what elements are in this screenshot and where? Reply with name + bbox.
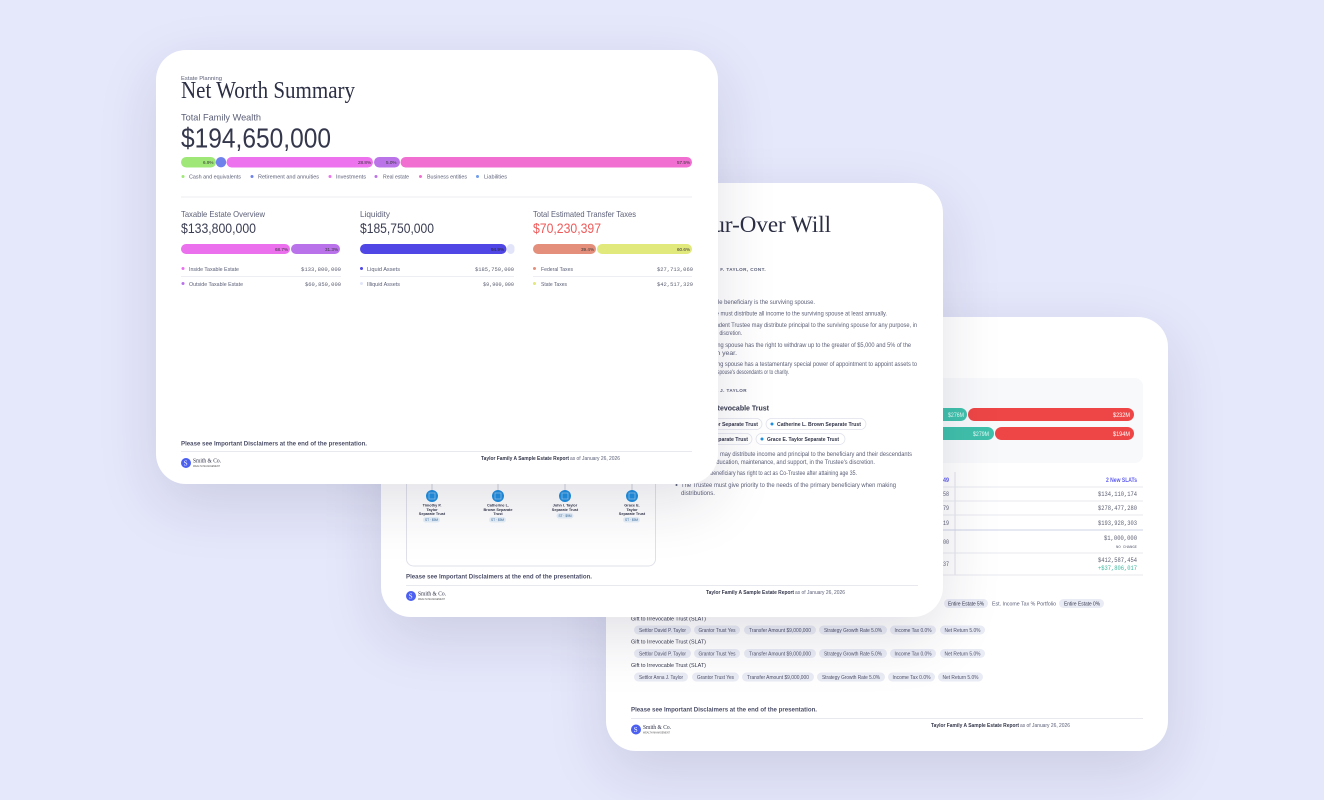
disclaimer: Please see Important Disclaimers at the end of the presentation. — [406, 574, 592, 580]
disclaimer: Please see Important Disclaimers at the end of the presentation. — [181, 440, 367, 448]
table: strategy comparison: 49 — [943, 478, 950, 484]
section: taxable estate overview — [181, 209, 342, 288]
footer with logo and report title — [631, 718, 1143, 734]
table: strategy comparison: 19 — [943, 520, 949, 527]
diagram: separate trusts organisation chart — [406, 440, 656, 566]
node: Grace E. Taylor Separate Trust: Taylor — [626, 508, 638, 512]
table: strategy comparison: +$37,806,017 — [1098, 565, 1137, 572]
text block: marital trust terms: The surviving spouse has the right to withdraw up to the greater of $5,000 and 5% of the — [690, 342, 912, 349]
assumptions: SLAT gift 2: Strategy Growth Rate 5.0% — [824, 652, 883, 658]
title: Net Worth Summary: Net Worth Summary — [181, 78, 355, 104]
table: strategy comparison — [620, 472, 1143, 575]
assumptions: SLAT gift 1: Settlor David P. Taylor — [639, 628, 686, 634]
panel: strategy bar chart: $276M — [948, 413, 964, 419]
stacked bar: wealth allocation: 57.5% — [677, 160, 690, 165]
legend: wealth allocation — [182, 174, 507, 180]
assumptions: SLAT gift 1: Income Tax 0.0% — [894, 628, 932, 634]
section: liquidity: $9,900,000 — [483, 281, 515, 288]
text block: marital trust terms: the surviving spouse's descendants or to charity. — [690, 369, 789, 376]
node: Timothy P. Taylor Separate Trust: Timothy P. — [423, 504, 441, 508]
assumptions: SLAT gift 2: Income Tax 0.0% — [894, 652, 932, 658]
footer with logo and report title: Smith & Co. — [643, 724, 671, 731]
footer with logo and report title: Taylor Family A Sample Estate Report — [481, 456, 569, 462]
legend: wealth allocation: Investments — [336, 174, 366, 180]
text block: separate trust terms: distributions. — [681, 490, 715, 497]
assumptions: SLAT gift 3 — [631, 663, 983, 682]
table: strategy comparison: 00 — [943, 539, 949, 546]
footer with logo and report title: WEALTH MANAGEMENT — [418, 597, 445, 601]
section: taxable estate overview: $60,850,000 — [305, 281, 342, 288]
panel: strategy bar chart: $194M — [1113, 432, 1130, 438]
section: liquidity: 94.9% — [491, 247, 504, 252]
node: John I. Taylor Separate Trust — [552, 480, 579, 518]
section: total estimated transfer taxes: State Taxes — [541, 282, 567, 288]
node: Catherine L. Brown Separate Trust: Brown Separate — [484, 508, 512, 512]
panel: strategy bar chart — [620, 378, 1143, 463]
section: liquidity — [360, 209, 515, 288]
section: total estimated transfer taxes: 39.4% — [581, 247, 594, 252]
table: strategy comparison: $412,587,454 — [1098, 557, 1137, 564]
label: Total Family Wealth: Total Family Wealth — [181, 112, 261, 124]
assumptions: estate pills: Entire Estate 0% — [1064, 602, 1101, 608]
pills: separate trusts: Timothy P. Taylor Separate Trust — [678, 422, 758, 428]
text block: separate trust terms: may distribute income and principal to the beneficiary and their descendants — [720, 451, 912, 458]
node: Timothy P. Taylor Separate Trust — [419, 480, 446, 522]
assumptions: SLAT gift 1: Net Return 5.0% — [944, 628, 981, 634]
assumptions: estate pills — [944, 599, 1104, 608]
node: John I. Taylor Separate Trust: Separate Trust — [552, 508, 579, 512]
node: Catherine L. Brown Separate Trust: Trust — [493, 512, 503, 516]
stacked bar: wealth allocation: 6.9% — [203, 160, 213, 165]
legend: wealth allocation: Liabilities — [484, 174, 507, 180]
legend: wealth allocation: Retirement and annuities — [258, 174, 319, 180]
node: Timothy P. Taylor Separate Trust: Separate Trust — [419, 512, 446, 516]
text block: marital trust terms: the Trustee's discretion. — [690, 330, 742, 337]
text block: separate trust terms: for education, maintenance, and support, in the Trustee's discretion. — [705, 459, 875, 466]
text block: separate trust terms — [676, 451, 912, 497]
table: strategy comparison: $134,110,174 — [1098, 491, 1137, 498]
text block: marital trust terms: trust each year. — [690, 350, 737, 357]
table: strategy comparison: 79 — [943, 505, 949, 512]
panel: report page 2, pour-over will — [381, 183, 943, 617]
assumptions: SLAT gift 2: Transfer Amount $9,000,000 — [749, 652, 811, 658]
footer with logo and report title — [181, 452, 692, 468]
subheading: Anna J. Taylor provisions: PROVISIONS OF ANNA J. TAYLOR — [661, 388, 747, 393]
assumptions: SLAT gift 1: Grantor Trust Yes — [698, 628, 736, 634]
section: liquidity: $185,750,000 — [475, 266, 515, 273]
panel: report page 3, trust strategy comparison — [606, 317, 1168, 751]
footer with logo and report title: WEALTH MANAGEMENT — [193, 464, 220, 468]
footer with logo and report title: Smith & Co. — [193, 458, 221, 464]
footer with logo and report title: Taylor Family A Sample Estate Report — [931, 723, 1019, 729]
panel: report page 1, net worth summary — [156, 50, 718, 484]
section: total estimated transfer taxes — [533, 209, 693, 288]
pills: separate trusts: John I. Taylor Separate Trust — [677, 437, 748, 443]
footer with logo and report title: Smith & Co. — [418, 590, 446, 598]
assumptions: SLAT gift 3: Gift to Irrevocable Trust (SLAT) — [631, 663, 706, 669]
footer with logo and report title: S — [409, 592, 413, 600]
assumptions: SLAT gift 2 — [631, 640, 985, 658]
table: strategy comparison: NO CHANGE — [1116, 546, 1138, 550]
section: total estimated transfer taxes: 60.6% — [677, 247, 690, 252]
footer with logo and report title: S — [634, 726, 638, 734]
node: Timothy P. Taylor Separate Trust: Taylor — [426, 508, 438, 512]
node: Grace E. Taylor Separate Trust — [619, 480, 646, 522]
section: total estimated transfer taxes: $42,517,329 — [657, 281, 693, 288]
section: total estimated transfer taxes: $70,230,397 — [533, 221, 601, 236]
disclaimer: Please see Important Disclaimers at the end of the presentation. — [631, 706, 817, 714]
node: Catherine L. Brown Separate Trust: Catherine L. — [487, 504, 509, 508]
section: taxable estate overview: Outside Taxable Estate — [189, 282, 243, 288]
section: taxable estate overview: Taxable Estate Overview — [181, 209, 266, 219]
footer with logo and report title — [406, 586, 918, 601]
footer with logo and report title: as of January 26, 2026 — [1020, 723, 1070, 729]
section: taxable estate overview: 68.7% — [275, 247, 288, 252]
total value: $194,650,000 — [181, 122, 331, 154]
legend: wealth allocation: Real estate — [383, 174, 409, 180]
stacked bar: wealth allocation — [181, 157, 692, 168]
assumptions: estate pills: Est. Income Tax % Portfolio — [992, 602, 1056, 608]
assumptions: SLAT gift 3: Transfer Amount $9,000,000 — [747, 675, 809, 681]
assumptions: SLAT gift 3: Strategy Growth Rate 5.0% — [822, 675, 881, 681]
node: Grace E. Taylor Separate Trust: Separate Trust — [619, 512, 646, 516]
panel: strategy bar chart: $232M — [1113, 413, 1130, 419]
assumptions: SLAT gift 1 — [631, 616, 985, 634]
table: strategy comparison: 37 — [943, 561, 949, 568]
table: strategy comparison: $193,928,303 — [1098, 520, 1137, 527]
table: strategy comparison: $1,000,000 — [1104, 535, 1137, 542]
text block: marital trust terms: An Independent Trustee may distribute principal to the surviving spouse for any purpose, in — [690, 322, 917, 329]
assumptions: SLAT gift 3: Settlor Anna J. Taylor — [639, 675, 683, 681]
section: liquidity: Liquidity — [360, 209, 391, 219]
pills: separate trusts: Grace E. Taylor Separate Trust — [767, 437, 839, 443]
text block: marital trust terms: The sole beneficiary is the surviving spouse. — [700, 299, 815, 306]
pills: separate trusts — [660, 418, 866, 444]
legend: wealth allocation: Business entities — [427, 174, 467, 180]
assumptions: SLAT gift 3: Income Tax 0.0% — [892, 675, 931, 681]
section: taxable estate overview: $133,800,000 — [181, 221, 256, 236]
footer with logo and report title: Taylor Family A Sample Estate Report — [706, 590, 794, 596]
section: taxable estate overview: 31.3% — [325, 247, 338, 252]
footer with logo and report title: S — [184, 460, 188, 468]
stacked bar: wealth allocation: 5.0% — [386, 160, 396, 165]
node: John I. Taylor Separate Trust: John I. Taylor — [553, 504, 578, 508]
assumptions: SLAT gift 3: Grantor Trust Yes — [697, 675, 734, 681]
node: John I. Taylor Separate Trust: ST · $9M — [558, 514, 572, 518]
table: strategy comparison: 2 New SLATs — [1106, 478, 1138, 484]
section: liquidity: $185,750,000 — [360, 221, 434, 236]
subheading: David F. Taylor provisions: PROVISIONS OF DAVID F. TAYLOR, CONT. — [660, 267, 766, 272]
footer with logo and report title: as of January 26, 2026 — [795, 590, 845, 596]
table: strategy comparison: 58 — [943, 491, 949, 498]
assumptions: SLAT gift 2: Grantor Trust Yes — [698, 652, 736, 658]
node: Catherine L. Brown Separate Trust: ST · $9M — [491, 518, 504, 522]
text block: separate trust terms: The Trustee must give priority to the needs of the primary beneficiary when making — [681, 482, 897, 489]
section: total estimated transfer taxes: Total Estimated Transfer Taxes — [533, 209, 636, 219]
assumptions: SLAT gift 1: Transfer Amount $9,000,000 — [749, 628, 811, 634]
assumptions: estate pills: Entire Estate 5% — [948, 602, 985, 608]
heading: Pour-Over Will: Pour-Over Will — [689, 212, 831, 237]
node: Grace E. Taylor Separate Trust: ST · $9M — [625, 518, 638, 522]
section: total estimated transfer taxes: $27,713,069 — [657, 266, 693, 273]
footer with logo and report title: as of January 26, 2026 — [570, 456, 620, 462]
assumptions: SLAT gift 1: Gift to Irrevocable Trust (SLAT) — [631, 616, 706, 622]
legend: wealth allocation: Cash and equivalents — [189, 174, 241, 180]
stacked bar: wealth allocation: 28.8% — [358, 160, 371, 165]
section: liquidity: Liquid Assets — [367, 267, 400, 273]
footer with logo and report title: WEALTH MANAGEMENT — [643, 730, 670, 734]
node: Timothy P. Taylor Separate Trust: ST · $9M — [425, 518, 438, 522]
node: Catherine L. Brown Separate Trust — [484, 480, 512, 522]
text block: separate trust terms: The beneficiary has right to act as Co-Trustee after attaining age 35. — [700, 470, 857, 477]
assumptions: SLAT gift 2: Settlor David P. Taylor — [639, 652, 686, 658]
section: taxable estate overview: Inside Taxable Estate — [189, 267, 239, 273]
panel: strategy bar chart: $279M — [973, 432, 989, 438]
assumptions: SLAT gift 1: Strategy Growth Rate 5.0% — [824, 628, 883, 634]
section: taxable estate overview: $133,800,000 — [301, 266, 342, 273]
heading: revocable trust: Anna J. Taylor Revocable Trust — [665, 406, 770, 412]
text block: marital trust terms: Trustee must distribute all income to the surviving spouse at least annually. — [700, 310, 887, 318]
pills: separate trusts: Catherine L. Brown Separate Trust — [777, 422, 861, 428]
table: strategy comparison: $278,477,280 — [1098, 505, 1137, 512]
text block: marital trust terms: The surviving spouse has a testamentary special power of appointment to appoint assets to — [690, 361, 917, 368]
eyebrow: Estate Planning: Estate Planning — [181, 76, 222, 82]
assumptions: SLAT gift 2: Gift to Irrevocable Trust (SLAT) — [631, 640, 706, 646]
assumptions: SLAT gift 3: Net Return 5.0% — [942, 675, 979, 681]
assumptions: SLAT gift 2: Net Return 5.0% — [944, 652, 981, 658]
node: Grace E. Taylor Separate Trust: Grace E. — [624, 504, 640, 508]
text block: marital trust terms — [690, 299, 917, 376]
section: total estimated transfer taxes: Federal Taxes — [541, 267, 573, 273]
section: liquidity: Illiquid Assets — [367, 282, 400, 288]
